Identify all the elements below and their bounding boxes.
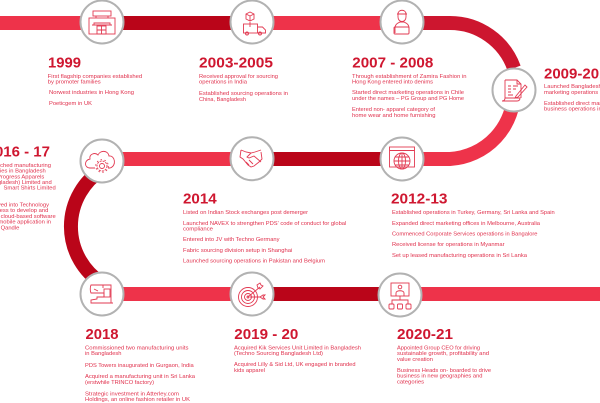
block: 2020-21: 2020-21	[397, 326, 453, 343]
block: 2007 - 2008	[352, 55, 467, 119]
block: 1999: Norwest industries in Hong Kong	[49, 90, 134, 96]
block: 2018: Commissioned two manufacturing units	[85, 346, 189, 352]
block: 2003-2005: Established sourcing operations in	[199, 91, 288, 97]
block: 2016 - 17: Qandle	[1, 226, 19, 232]
block: 2012-13: 2012-13	[391, 191, 448, 208]
block: 2009-20: business operations in	[544, 106, 600, 112]
block: 2019 - 20: (Techno Sourcing Bangladesh Ltd)	[234, 351, 323, 357]
block: 1999: by promoter families	[48, 80, 101, 86]
block: 2014: Launched NAVEX to strengthen PDS' code of conduct for global	[183, 221, 346, 227]
block: 2007 - 2008: 2007 - 2008	[352, 55, 433, 72]
block: 2003-2005: Received approval for sourcing	[199, 74, 278, 80]
block: 1999: First flagship companies established	[48, 74, 142, 80]
block: 2018: PDS Towers inaugurated in Gurgaon, India	[85, 363, 194, 369]
block: 2020-21: value creation	[397, 357, 433, 363]
block: 2012-13	[391, 191, 555, 259]
icon: document and pen	[502, 80, 527, 101]
block: 2009-20	[544, 66, 600, 112]
block: 1999	[48, 55, 142, 107]
block: 2012-13: Established operations in Turkey, Germany, Sri Lanka and Spain	[392, 210, 555, 216]
block: 2018: 2018	[86, 326, 118, 343]
block: 2020-21: Appointed Group CEO for driving	[397, 346, 480, 352]
block: 2007 - 2008: home wear and home furnishing	[352, 113, 436, 119]
block: 2003-2005: China, Bangladesh	[199, 97, 246, 103]
block: 2018: (erstwhile TRINCO factory)	[85, 380, 154, 386]
block: 2014: Fabric sourcing division setup in Shanghai	[183, 248, 292, 254]
icon: handshake	[240, 150, 262, 167]
block: 2020-21: categories	[397, 380, 424, 386]
block: 2003-2005: operations in India	[199, 80, 247, 86]
block: 2014	[183, 190, 346, 264]
block: 2020-21: sustainable growth, profitability and	[397, 351, 489, 357]
block: 2007 - 2008: Through establishment of Zamira Fashion in	[352, 74, 467, 80]
block: 2012-13: Received license for operations in Myanmar	[392, 242, 505, 248]
icon: target with arrows	[238, 283, 265, 306]
block: 2012-13: Set up leased manufacturing operations in Sri Lanka	[392, 253, 527, 259]
block: 2003-2005: 2003-2005	[199, 55, 273, 72]
block: 2014: 2014	[183, 190, 217, 207]
block: 2020-21: business in new geographies and	[397, 374, 482, 380]
icon: sewing machine	[90, 285, 113, 303]
block: 2014: Listed on Indian Stock exchanges post demerger	[183, 210, 308, 216]
block: 2007 - 2008: Hong Kong entered into denims	[352, 80, 433, 86]
block: 2020-21	[397, 326, 491, 386]
block: 2018: Acquired a manufacturing unit in Sri Lanka	[85, 374, 195, 380]
block: 2007 - 2008: Entered non- apparel category of	[352, 107, 436, 113]
block: 2018: Holdings, an online fashion retailer in UK	[85, 397, 190, 403]
block: 2019 - 20: 2019 - 20	[234, 326, 298, 343]
block: 2007 - 2008: Started direct marketing operations in Chile	[352, 90, 464, 96]
block: 2016 - 17	[0, 144, 56, 232]
block: 2019 - 20: kids apparel	[234, 368, 265, 374]
icon: delivery truck with parcel	[244, 12, 266, 35]
block: 2018: Strategic investment in Atterley.com	[85, 392, 180, 398]
block: 2012-13: Commenced Corporate Services operations in Bangalore	[392, 232, 538, 238]
block: 2014: Entered into JV with Techno Germany	[183, 237, 280, 243]
milestone circles	[80, 0, 536, 316]
icon: organisation chart	[389, 283, 411, 309]
timeline path	[0, 23, 600, 294]
block: 1999: 1999	[48, 55, 81, 72]
icon: person at laptop	[394, 10, 409, 34]
block: 2012-13: Expanded direct marketing offices in Melbourne, Australia	[392, 221, 540, 227]
icon: storefront	[89, 11, 115, 34]
block: 2016 - 17: Smart Shirts Limited	[4, 186, 56, 192]
block: 2007 - 2008: under the names – PG Group and PG Home	[352, 96, 464, 102]
block: 2020-21: Business Heads on- boarded to drive	[397, 368, 491, 374]
block: 2019 - 20: Acquired Kik Services Unit Limited in Bangladesh	[234, 346, 361, 352]
block: 1999: Poeticgem in UK	[49, 101, 92, 107]
block: 2003-2005	[199, 55, 288, 103]
block: 2014: Launched sourcing operations in Pakistan and Belgium	[183, 258, 326, 264]
icon: cloud with gear	[86, 151, 114, 172]
block: 2014: compliance	[183, 226, 213, 232]
block: 2018	[85, 326, 195, 403]
block: 2018: in Bangladesh	[85, 351, 122, 357]
block: 2019 - 20: Acquired Lilly & Sid Ltd, UK engaged in branded	[234, 362, 356, 368]
block: 2019 - 20	[234, 326, 361, 374]
icon: globe in browser window	[390, 147, 414, 169]
